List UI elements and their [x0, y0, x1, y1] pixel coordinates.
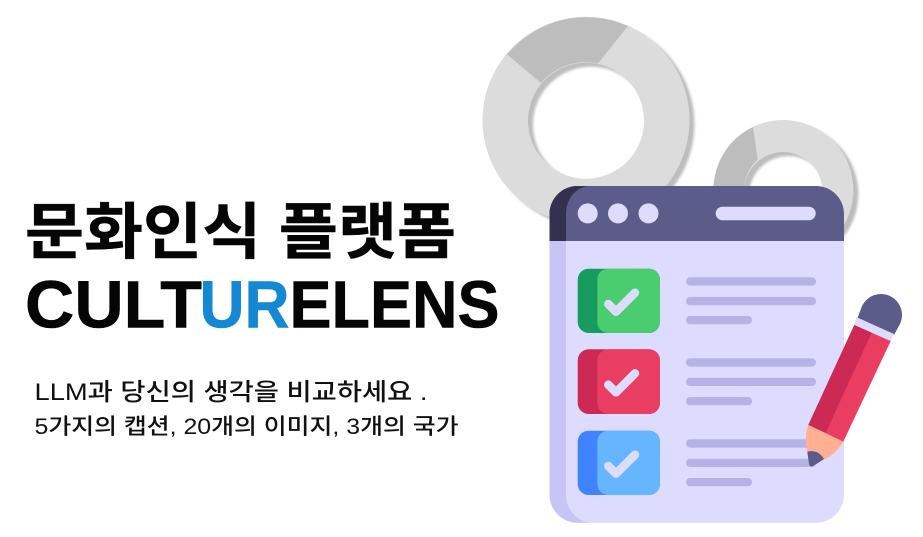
pencil eraser — [858, 294, 902, 335]
chart: small donut — [713, 120, 853, 260]
window header — [550, 186, 844, 241]
pencil body — [808, 325, 891, 442]
window header left edge — [550, 186, 590, 241]
checkbox: blue — [578, 431, 660, 495]
pencil body shade — [808, 325, 872, 433]
text lines: row three — [686, 439, 816, 486]
text lines: row two — [686, 358, 816, 405]
heading: CULTURELENS wordmark: CULT — [25, 268, 202, 342]
icon: pencil — [806, 294, 902, 467]
heading: CULTURELENS wordmark: ELENS — [290, 268, 500, 342]
heading: Korean title: 문화인식 플랫폼 — [25, 198, 456, 266]
text lines: row one — [686, 277, 816, 324]
checkbox: green — [578, 269, 660, 333]
card left edge — [550, 241, 590, 523]
text block: tagline: LLM과 당신의 생각을 비교하세요 . — [34, 379, 428, 406]
pencil lead — [807, 451, 824, 466]
window address bar — [716, 207, 816, 220]
card body — [550, 241, 844, 523]
pencil tip wood — [806, 425, 843, 467]
pencil band — [854, 317, 894, 341]
panel: checklist window — [550, 186, 844, 523]
heading: CULTURELENS wordmark — [25, 268, 500, 342]
heading: CULTURELENS wordmark: UR — [200, 268, 290, 342]
text block: dataset summary: 5가지의 캡션, 20개의 이미지, 3개의 국가 — [34, 414, 458, 439]
checkbox: red — [578, 349, 660, 414]
chart: large donut — [483, 17, 690, 224]
window dots — [578, 203, 658, 223]
